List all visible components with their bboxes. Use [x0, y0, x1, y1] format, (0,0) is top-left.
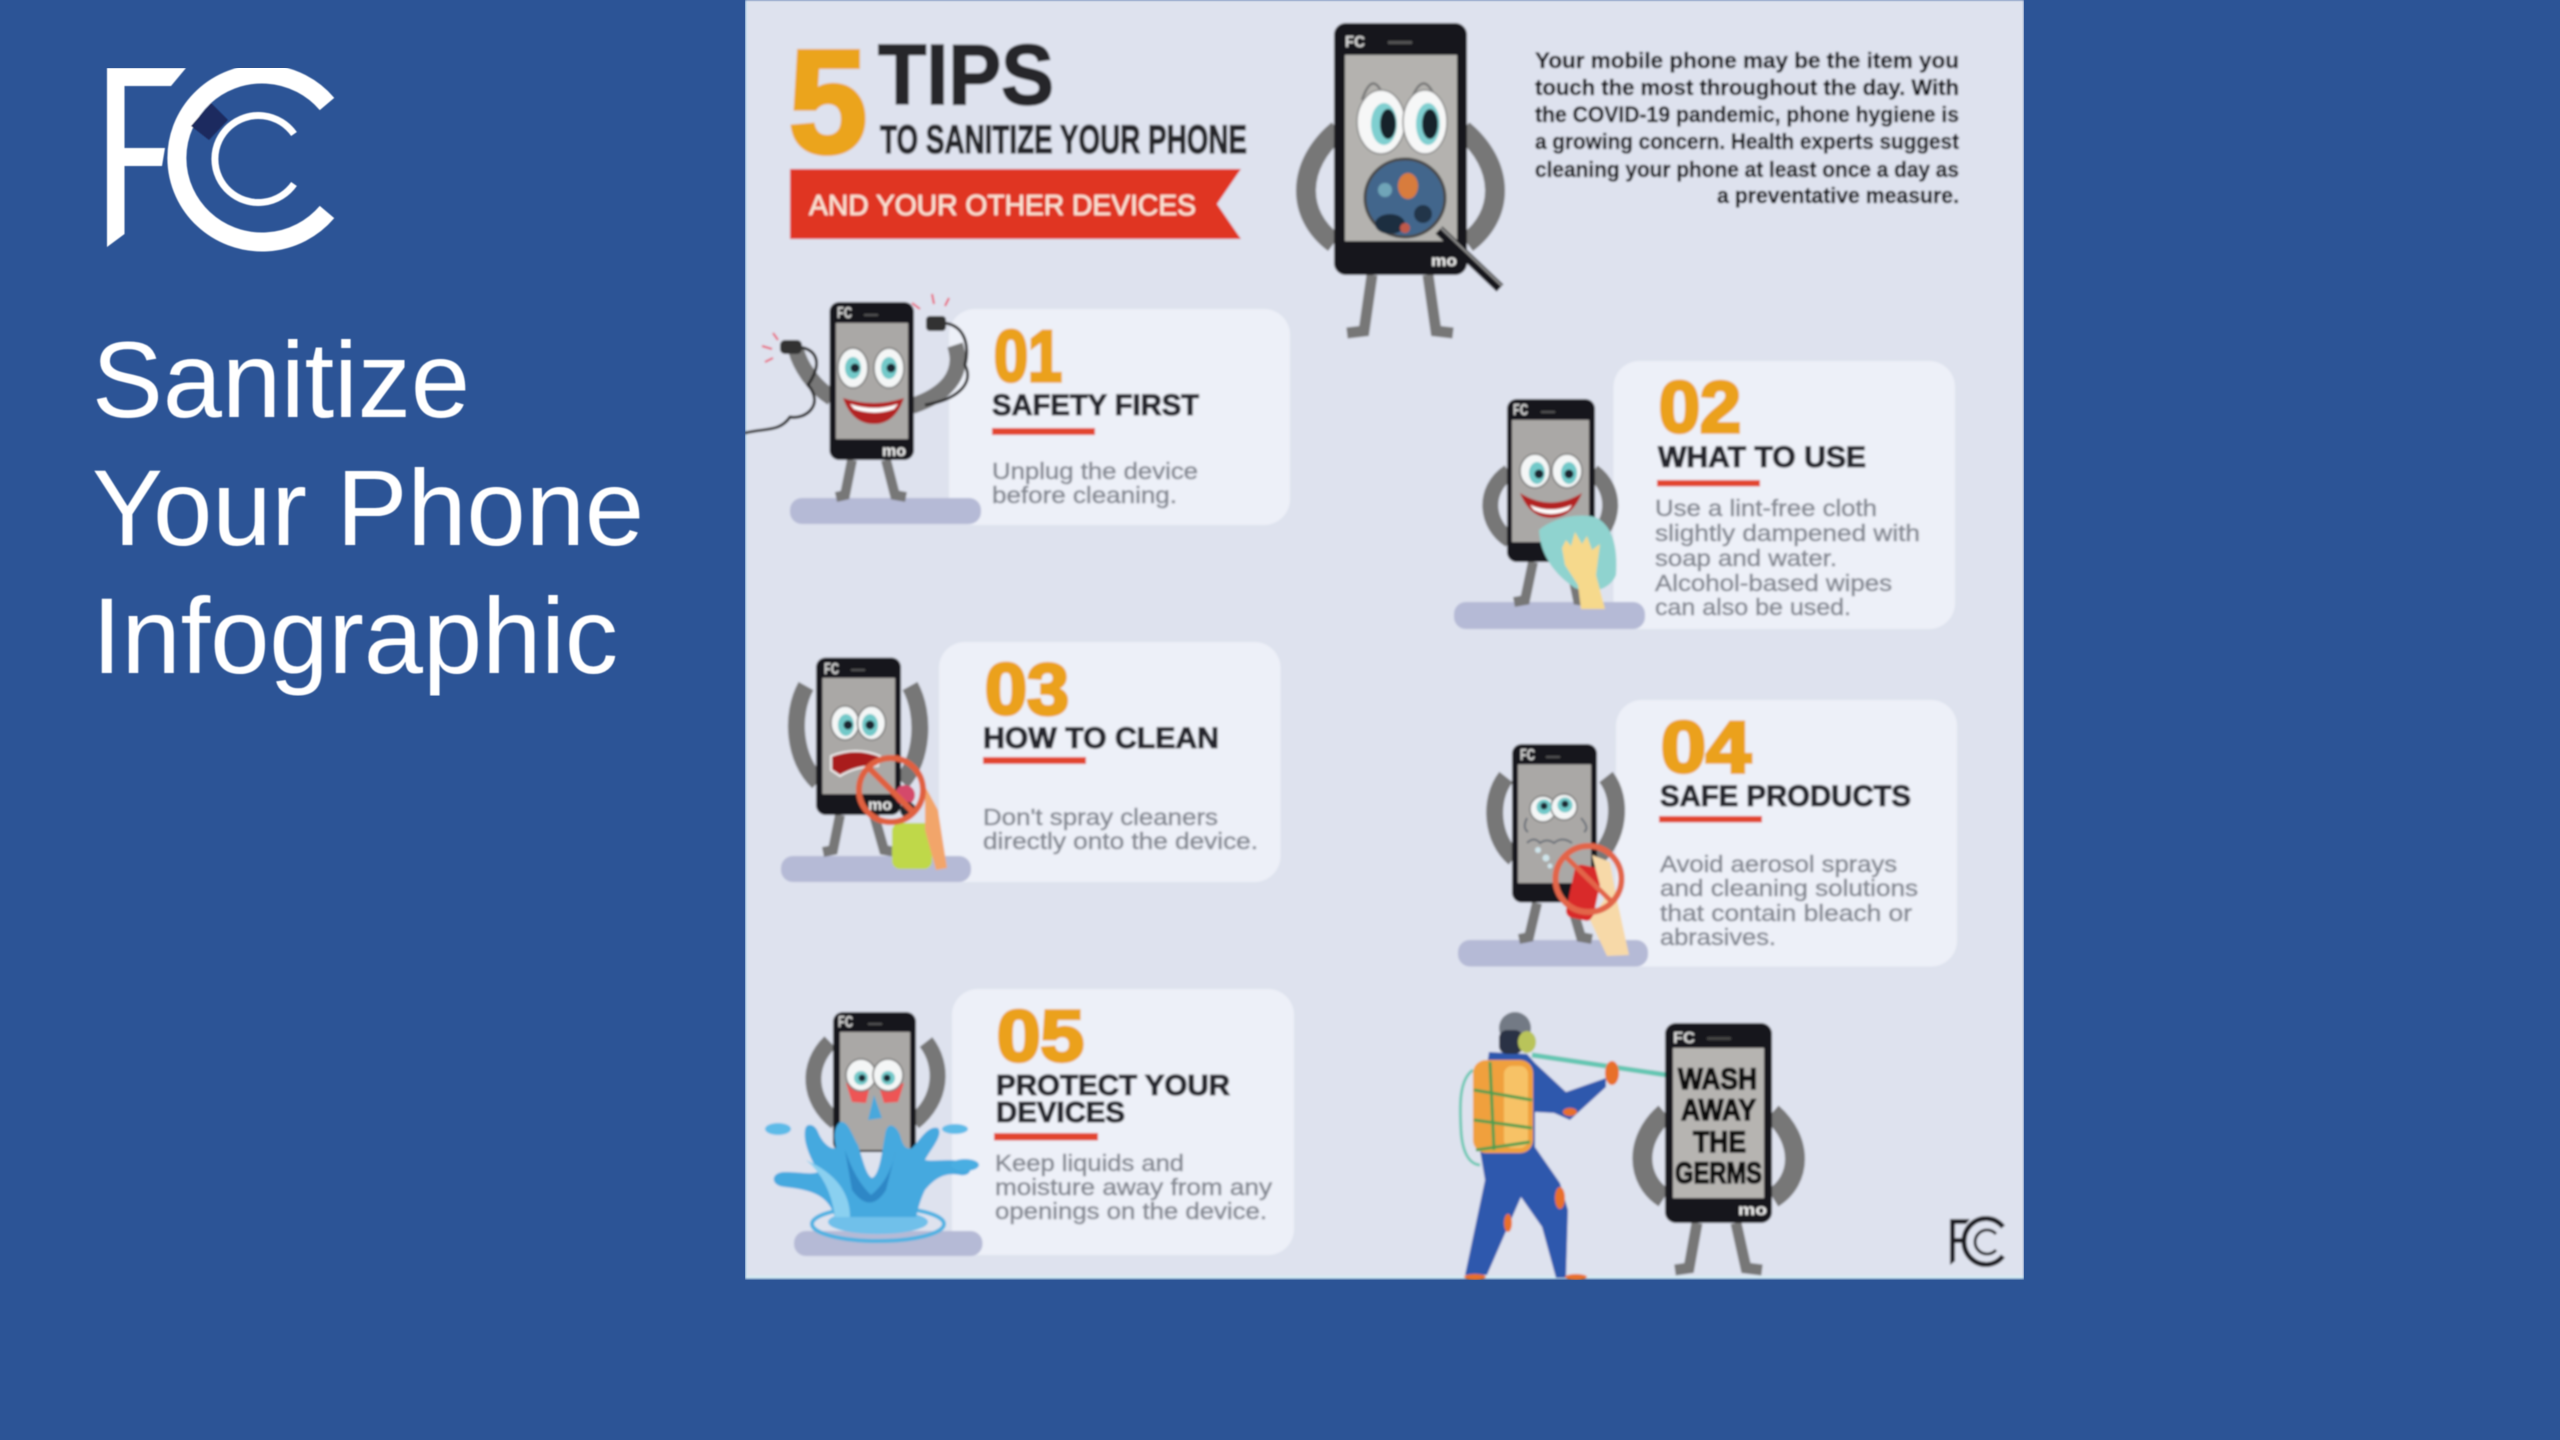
- big number 5: 5: [789, 20, 867, 183]
- subtitle: TO SANITIZE YOUR PHONE: [880, 118, 1247, 162]
- intro text: a growing concern. Health experts suggest: [1535, 129, 1960, 154]
- intro text: a preventative measure.: [1717, 183, 1959, 208]
- card 04: safe products: abrasives.: [1660, 924, 1776, 950]
- magnifier: [1365, 159, 1502, 288]
- card 01: safety first: Unplug the device: [992, 458, 1198, 484]
- glove and patches: [1464, 1061, 1619, 1280]
- card 02: what to use: slightly dampened with: [1655, 520, 1920, 546]
- suit body: [1465, 1052, 1606, 1278]
- card 05: protect your devices: Keep liquids and: [995, 1150, 1184, 1176]
- card 01: safety first: [949, 309, 1290, 525]
- character 03 no spray: FC: [824, 661, 839, 678]
- card 04: safe products: Avoid aerosol sprays: [1660, 851, 1897, 877]
- wash away the germs phone: mo: [1738, 1202, 1767, 1219]
- wash away the germs phone: GERMS: [1675, 1157, 1762, 1190]
- card 05: protect your devices: PROTECT YOUR: [996, 1070, 1230, 1102]
- intro text: touch the most throughout the day. With: [1535, 75, 1959, 100]
- card 04: safe products: 04: [1661, 708, 1751, 788]
- card 02: what to use: soap and water.: [1655, 545, 1837, 571]
- hose loop: [1460, 1070, 1480, 1165]
- character 02 wiping: [1454, 399, 1645, 629]
- hero phone with magnifier: FC: [1345, 34, 1365, 51]
- card 04: safe products: SAFE PRODUCTS: [1660, 780, 1911, 813]
- card 03: how to clean: HOW TO CLEAN: [983, 722, 1219, 755]
- aerosol and hand: [1565, 855, 1629, 956]
- intro text: [1535, 48, 1960, 208]
- character 05 splash: FC: [838, 1014, 853, 1031]
- card 04: safe products: and cleaning solutions: [1660, 875, 1918, 901]
- card 02: what to use: can also be used.: [1655, 594, 1851, 620]
- character 03 no spray: mo: [868, 797, 892, 814]
- infographic panel: [745, 0, 2024, 1280]
- oxygen tank: [1473, 1060, 1533, 1153]
- card 03: how to clean: 03: [985, 650, 1069, 730]
- card 02: what to use: Alcohol-based wipes: [1655, 570, 1892, 596]
- hero phone with magnifier: [1306, 23, 1502, 333]
- prohibited sign: [859, 758, 923, 822]
- small FCC logo: [1950, 1219, 2003, 1265]
- head and mask: [1499, 1012, 1536, 1054]
- diver spraying phone: [1460, 1012, 1667, 1280]
- sidebar: [92, 68, 644, 696]
- wash away the germs phone: FC: [1673, 1030, 1695, 1047]
- red ribbon: AND YOUR OTHER DEVICES: [809, 190, 1196, 222]
- card 02: what to use: [1614, 361, 1955, 629]
- intro text: Your mobile phone may be the item you: [1535, 48, 1959, 73]
- card 05: protect your devices: [952, 989, 1294, 1255]
- wash away the germs phone: [1642, 1023, 1795, 1270]
- title: Infographic: [92, 575, 618, 696]
- card 03: how to clean: [939, 642, 1280, 882]
- card 03: how to clean: Don't spray cleaners: [983, 804, 1218, 830]
- wash away the germs phone: AWAY: [1681, 1094, 1756, 1127]
- character 04 crying: FC: [1520, 747, 1535, 764]
- prohibited sign: [1556, 846, 1622, 912]
- title: Your Phone: [92, 447, 644, 568]
- spray bottle: [892, 785, 947, 870]
- card 02: what to use: WHAT TO USE: [1658, 441, 1866, 474]
- red ribbon: [790, 169, 1241, 239]
- character 03 no spray: [781, 658, 971, 882]
- intro text: cleaning your phone at least once a day as: [1535, 157, 1959, 182]
- card 04: safe products: that contain bleach or: [1660, 900, 1912, 926]
- card 05: protect your devices: 05: [997, 997, 1084, 1077]
- card 04: safe products: [1616, 700, 1957, 966]
- character 02 wiping: FC: [1513, 402, 1528, 419]
- card 05: protect your devices: DEVICES: [996, 1097, 1125, 1129]
- FCC logo: [107, 68, 327, 247]
- card 01: safety first: 01: [994, 317, 1062, 397]
- wash away the germs phone: THE: [1693, 1126, 1746, 1159]
- heading: [789, 20, 1247, 239]
- cloth and hand: [1539, 515, 1616, 609]
- character 05 splash: [765, 1012, 982, 1256]
- card 02: what to use: Use a lint-free cloth: [1655, 495, 1877, 521]
- character 04 crying: [1458, 744, 1648, 966]
- spray wand: [1532, 1055, 1667, 1075]
- character 01 unplugged: FC: [837, 305, 852, 322]
- card 01: safety first: before cleaning.: [992, 482, 1177, 508]
- TIPS: TIPS: [878, 28, 1054, 123]
- character 01 unplugged: [745, 294, 981, 524]
- card 02: what to use: 02: [1659, 368, 1741, 448]
- hero phone with magnifier: mo: [1431, 253, 1457, 270]
- intro text: the COVID-19 pandemic, phone hygiene is: [1535, 102, 1959, 127]
- character 01 unplugged: mo: [882, 443, 906, 460]
- card 05: protect your devices: openings on the device.: [995, 1198, 1267, 1224]
- card 01: safety first: SAFETY FIRST: [992, 389, 1199, 422]
- card 03: how to clean: directly onto the device.: [983, 828, 1258, 854]
- water splash: [765, 1122, 979, 1241]
- card 05: protect your devices: moisture away from any: [995, 1174, 1273, 1200]
- title: Sanitize: [92, 319, 470, 440]
- wash away the germs phone: WASH: [1678, 1063, 1757, 1096]
- title: [92, 319, 644, 696]
